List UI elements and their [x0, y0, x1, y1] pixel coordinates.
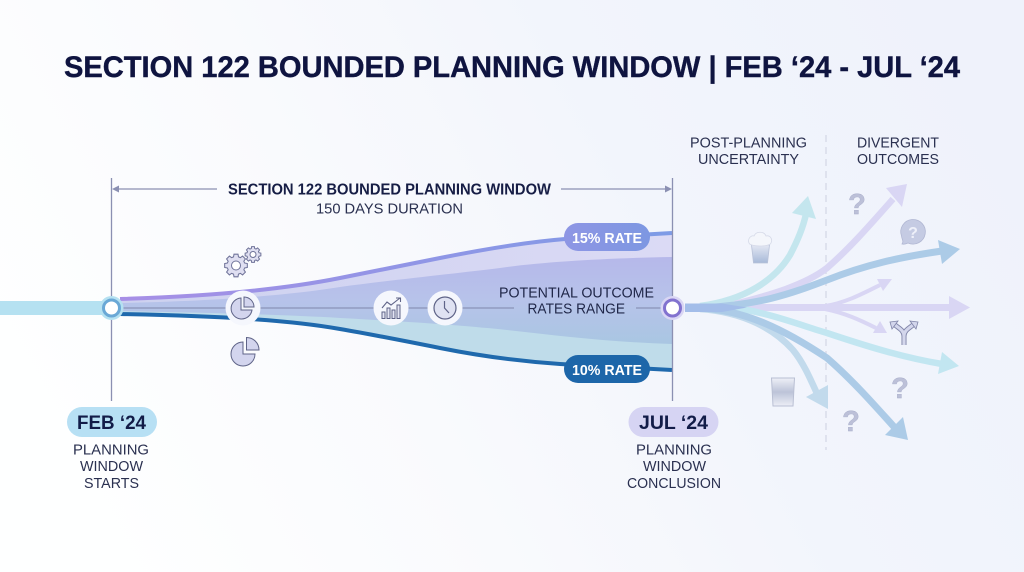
- funnel: upper rate line: [120, 233, 672, 299]
- heading: post-planning uncertainty: [690, 134, 807, 168]
- label: potential outcome rates range: RATES RANGE: [528, 300, 625, 318]
- icon: question mark: ?: [842, 406, 860, 438]
- date: Feb '24: FEB ‘24: [77, 413, 146, 434]
- caption: planning window starts: STARTS: [84, 475, 139, 492]
- icon: empty glass: [772, 378, 794, 406]
- arrow: teal rising: [700, 196, 816, 306]
- incoming timeline bar: [0, 301, 105, 315]
- funnel: outer top band: [120, 233, 672, 316]
- arrow: light blue falling: [700, 309, 828, 409]
- pill: 10% rate: 10% RATE: [572, 363, 642, 379]
- arrow: teal falling: [735, 308, 959, 374]
- heading: post-planning uncertainty: POST-PLANNING: [690, 134, 807, 152]
- label: potential outcome rates range: POTENTIAL OUTCOME: [499, 284, 654, 302]
- start date block: [67, 407, 157, 492]
- arrow: blue rising: [700, 240, 960, 308]
- icon: clock: [428, 290, 462, 326]
- divergent arrows: [685, 184, 970, 440]
- icon: speech bubble question: ?: [908, 225, 918, 242]
- arrow: blue falling: [700, 308, 908, 440]
- heading: post-planning uncertainty: UNCERTAINTY: [698, 151, 799, 168]
- date: Jul '24: JUL ‘24: [639, 413, 708, 434]
- heading: divergent outcomes: DIVERGENT: [857, 134, 939, 152]
- icon: question mark: ?: [848, 189, 866, 221]
- title: SECTION 122 BOUNDED PLANNING WINDOW | FEB ‘24 - JUL ‘24: [64, 51, 960, 84]
- duration arrow right: [561, 186, 672, 192]
- arrow: lavender straight: [740, 296, 970, 319]
- dashed divider: [825, 135, 827, 450]
- icon: full cup: [749, 232, 772, 263]
- duration arrow left: [112, 186, 217, 192]
- caption: planning window conclusion: WINDOW: [643, 458, 707, 475]
- funnel: lower rate line: [120, 314, 672, 370]
- end node: [660, 296, 684, 320]
- window heading: SECTION 122 BOUNDED PLANNING WINDOW: [228, 182, 551, 198]
- pill: 15% rate: 15% RATE: [572, 231, 642, 247]
- arrow: lavender rising: [735, 184, 907, 304]
- icon: speech bubble question: [901, 219, 925, 244]
- icon: question mark: ?: [891, 373, 909, 405]
- caption: planning window starts: PLANNING: [73, 442, 149, 458]
- icon: pie chart on funnel: [226, 290, 260, 326]
- caption: planning window starts: [73, 442, 149, 492]
- pill: Jul '24: [628, 407, 718, 437]
- start node: [100, 296, 124, 320]
- funnel: outer bottom band: [120, 300, 672, 370]
- icon: gears: [225, 247, 261, 277]
- arrow: small lavender lower: [825, 309, 887, 333]
- caption: planning window conclusion: PLANNING: [636, 442, 712, 458]
- window duration: 150 DAYS DURATION: [316, 200, 463, 218]
- pill: 15% rate: [564, 223, 650, 251]
- caption: planning window conclusion: [627, 442, 721, 492]
- funnel: inner rate band: [120, 257, 672, 344]
- left vertical boundary: [110, 178, 112, 401]
- label: potential outcome rates range: [499, 284, 654, 318]
- funnel: centre line: [122, 307, 662, 309]
- caption: planning window starts: WINDOW: [80, 458, 144, 475]
- right vertical boundary: [672, 178, 674, 401]
- icon: growth chart: [374, 290, 408, 326]
- pill: Feb '24: [67, 407, 157, 437]
- pill: 10% rate: [564, 355, 650, 383]
- arrow trunk: [685, 304, 747, 312]
- arrow: small lavender upper: [825, 279, 892, 306]
- end date block: [627, 407, 721, 492]
- planning window funnel: [120, 233, 672, 370]
- heading: divergent outcomes: OUTCOMES: [857, 151, 939, 168]
- caption: planning window conclusion: CONCLUSION: [627, 475, 721, 492]
- icon: forked path: [890, 321, 918, 345]
- icon: pie chart below funnel: [231, 338, 259, 366]
- heading: divergent outcomes: [857, 134, 939, 168]
